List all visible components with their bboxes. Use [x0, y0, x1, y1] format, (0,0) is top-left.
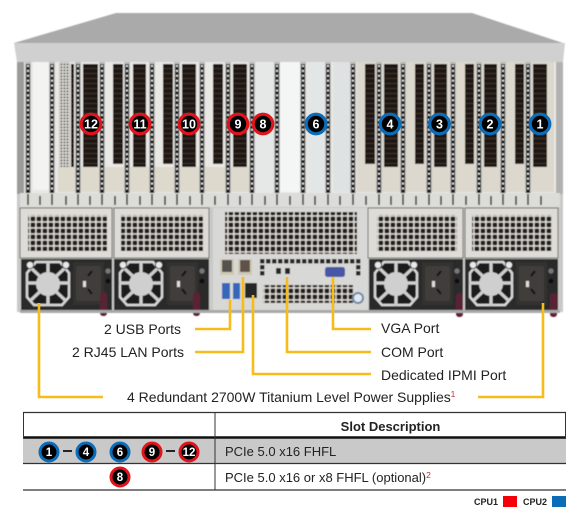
table grid lines — [23, 412, 566, 490]
power supply 4 — [465, 208, 558, 317]
table shaded row — [23, 438, 566, 463]
badge 4: 4 — [387, 118, 394, 132]
badge 2 — [480, 114, 500, 134]
legend: CPU colours: CPU2 — [523, 497, 547, 507]
callout: power supplies: 1 — [451, 390, 456, 399]
callout: USB ports: 2 USB Ports — [104, 321, 181, 337]
badge 9 — [228, 114, 248, 134]
power supply 2 — [114, 208, 209, 316]
badge 6: 6 — [313, 118, 320, 132]
perforated filler card — [59, 62, 70, 167]
row 1 badges: 6 — [117, 447, 123, 459]
perforated slot brackets — [25, 62, 531, 193]
callout: IPMI port: Dedicated IPMI Port — [381, 367, 506, 383]
badge 8: 8 — [260, 118, 267, 132]
badge 11: 11 — [133, 118, 147, 132]
row 2 badge — [111, 468, 129, 486]
badge 1: 1 — [537, 118, 544, 132]
slot description table — [23, 412, 566, 490]
IPMI port — [245, 283, 257, 298]
legend: CPU colours: CPU1 — [474, 497, 498, 507]
screw — [353, 293, 363, 303]
USB ports — [222, 283, 240, 299]
slot badges on chassis — [81, 114, 550, 134]
power supply 1 — [20, 208, 112, 316]
badge 4 — [380, 114, 400, 134]
LAN ports — [220, 259, 252, 275]
callout: power supplies: 4 Redundant 2700W Titanium Level Power Supplies — [127, 389, 451, 405]
chassis top surface — [14, 13, 563, 43]
callout: LAN ports: 2 RJ45 LAN Ports — [72, 344, 184, 360]
row 2 description: 2 — [426, 470, 431, 480]
legend: CPU colours — [474, 496, 566, 507]
chassis front lip — [14, 43, 565, 62]
row 2 description: PCIe 5.0 x16 or x8 FHFL (optional) — [225, 470, 426, 485]
server chassis rear view — [14, 13, 565, 317]
badge 3 — [430, 114, 449, 134]
row 1 badges — [40, 443, 198, 461]
callout: IPMI port — [253, 295, 506, 383]
callout: LAN ports — [72, 277, 243, 360]
IO panel — [213, 208, 368, 310]
callout: COM port: COM Port — [381, 344, 443, 360]
chassis body — [17, 62, 563, 312]
IO vent grid — [225, 212, 357, 254]
row 1 badges: 4 — [83, 447, 90, 459]
row 1 badges: 1 — [46, 447, 53, 459]
VGA port — [325, 267, 345, 277]
lower vent grid — [263, 285, 353, 303]
badge 10: 10 — [182, 118, 196, 132]
badge 2: 2 — [487, 118, 494, 132]
badge 12: 12 — [84, 118, 98, 132]
connector strip — [20, 193, 560, 207]
row 1 description: PCIe 5.0 x16 FHFL — [225, 444, 336, 459]
row 1 badges: 9 — [149, 447, 155, 459]
badge 11 — [130, 114, 150, 134]
callout: VGA port: VGA Port — [381, 320, 439, 336]
row 1 badges: 12 — [183, 447, 195, 459]
table heading: Slot Description — [341, 419, 440, 434]
callout: USB ports — [104, 300, 230, 337]
heatsinks of GPU cards — [71, 64, 547, 167]
row 2 badge: 8 — [117, 472, 124, 484]
PCIe slot bay — [24, 62, 556, 193]
badge 3: 3 — [436, 118, 443, 132]
badge 9: 9 — [235, 118, 242, 132]
badge 1 — [530, 114, 550, 134]
power supply 3 — [368, 208, 463, 317]
badge 6 — [306, 114, 326, 134]
callout: power supplies — [39, 303, 543, 405]
badge 10 — [179, 114, 199, 134]
callout: VGA port — [333, 277, 439, 336]
COM port area — [260, 259, 360, 276]
badge 8 — [253, 114, 273, 134]
callout: COM port — [287, 277, 443, 360]
badge 12 — [81, 114, 101, 134]
